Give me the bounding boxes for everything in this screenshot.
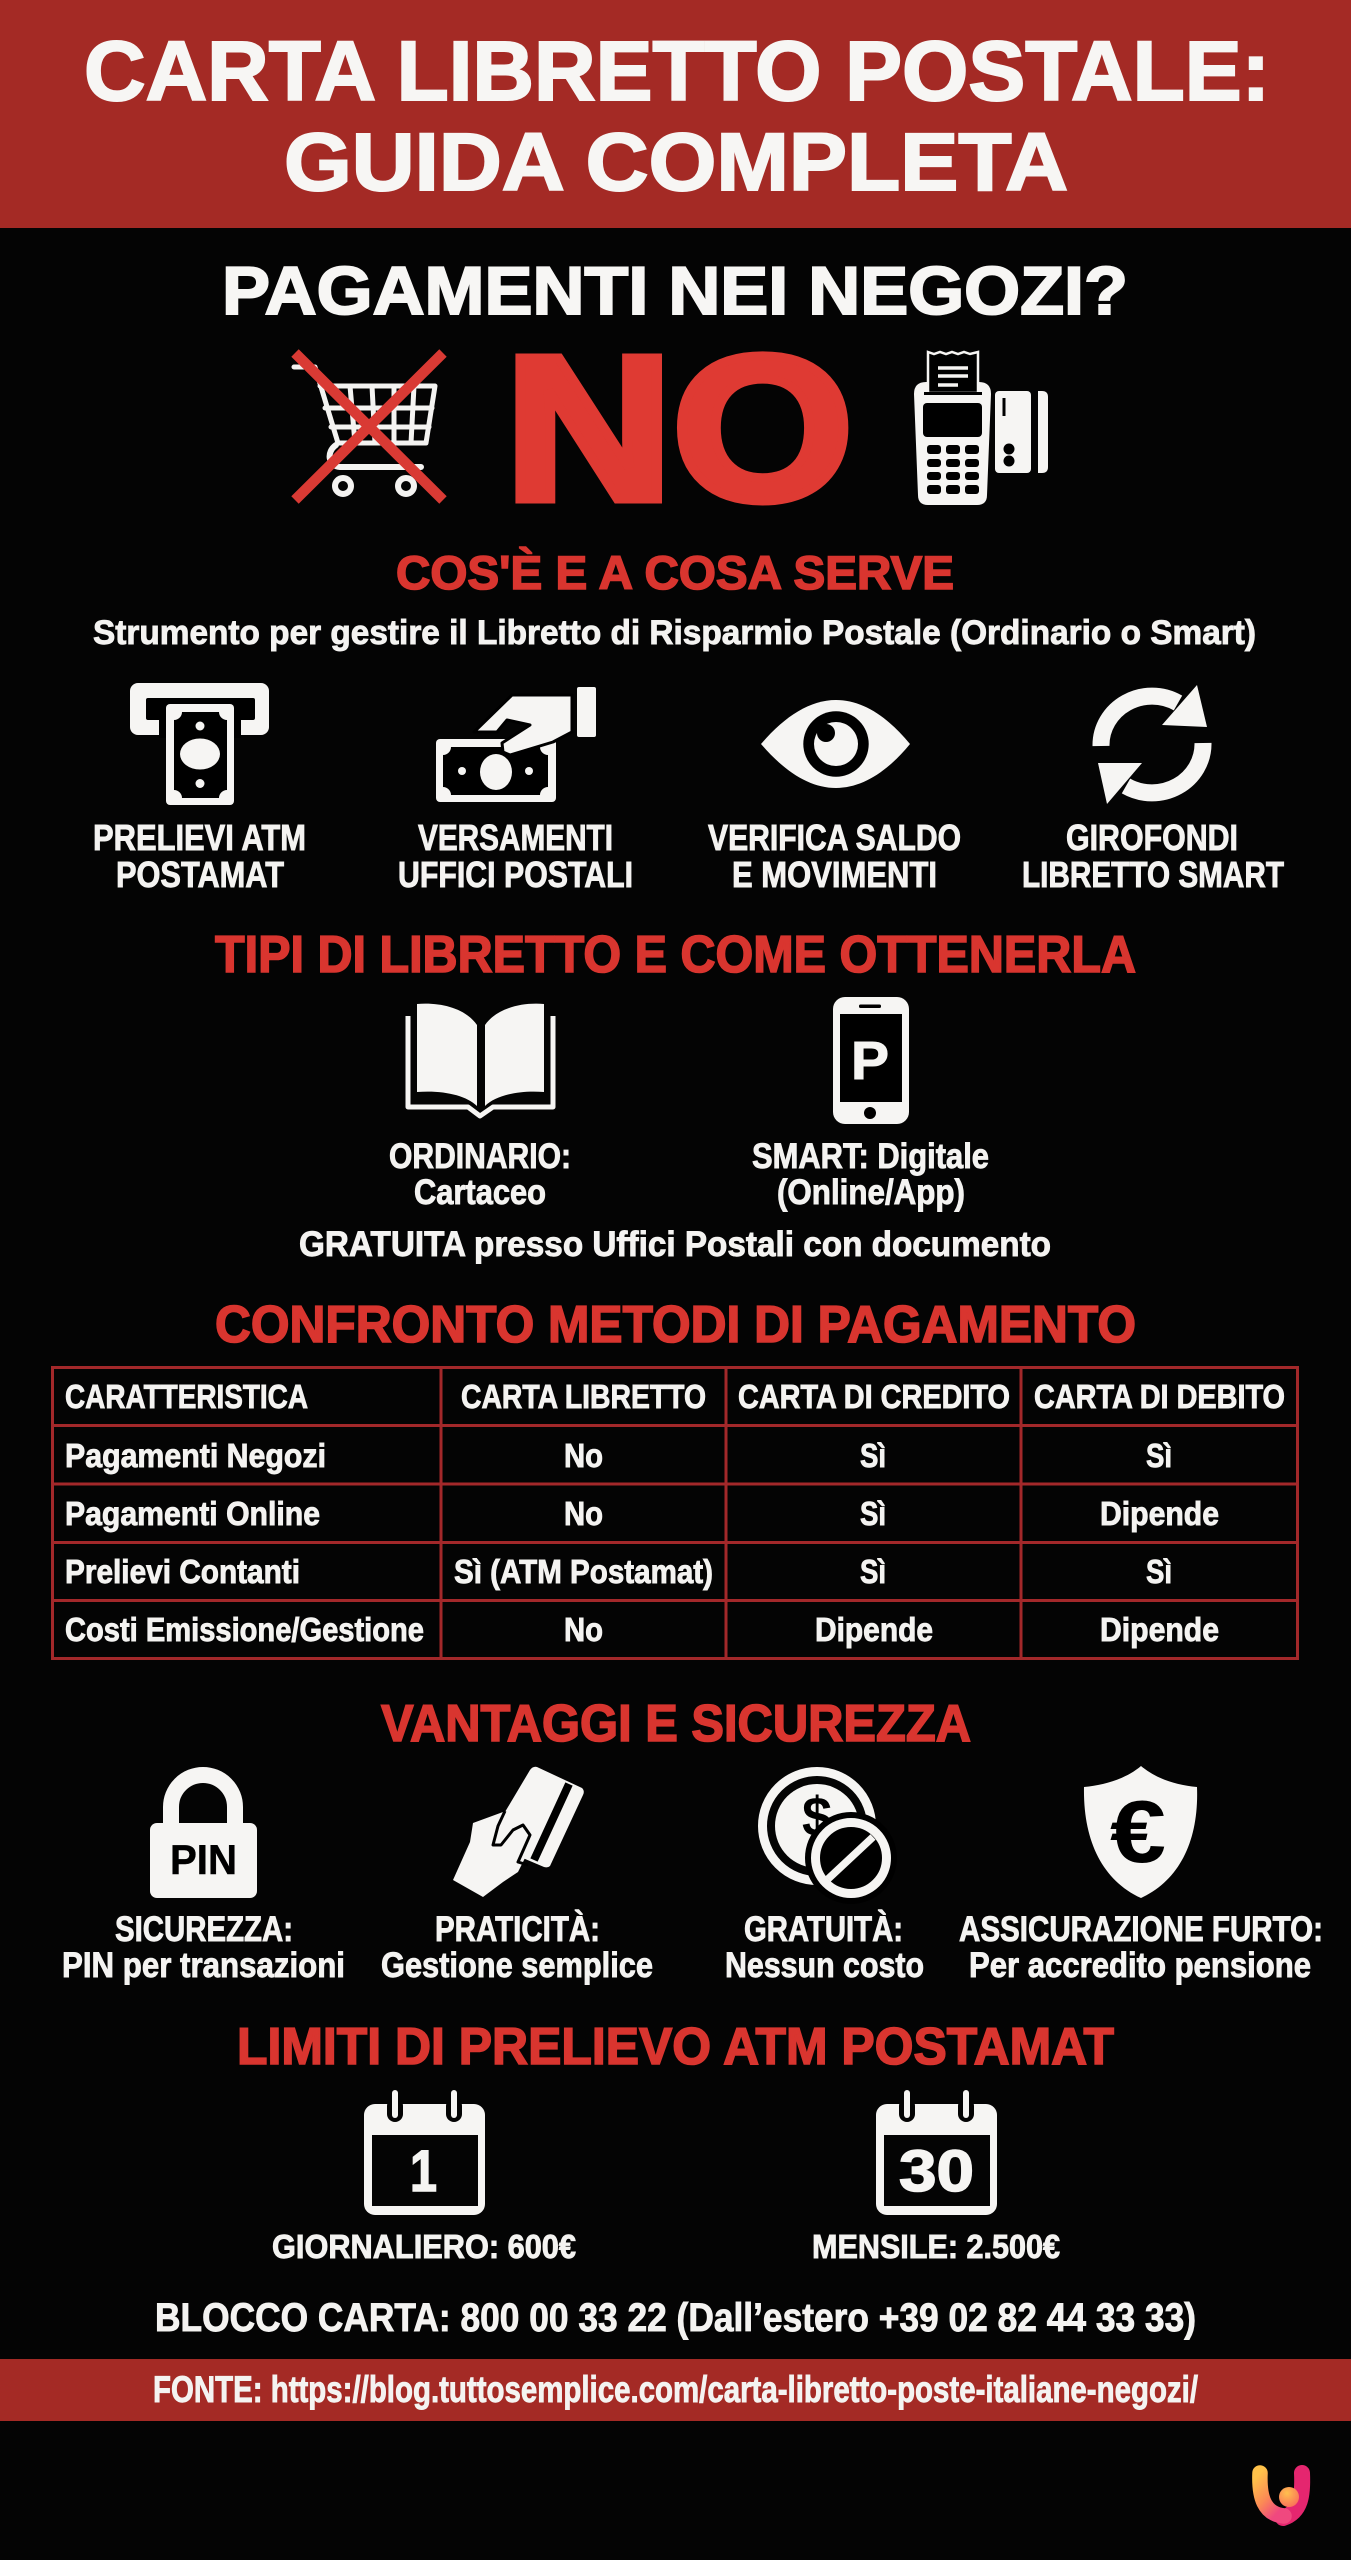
feature: verifica saldo: E MOVIMENTI <box>732 854 937 895</box>
icon: open book <box>408 1004 553 1116</box>
table header row: CARATTERISTICA <box>65 1378 308 1415</box>
feature: girofondi: GIROFONDI <box>1066 817 1238 858</box>
description: Strumento per gestire il Libretto di Risparmio Postale (Ordinario o Smart) <box>93 614 1256 652</box>
type: ordinario: Cartaceo <box>414 1173 546 1212</box>
title <box>84 24 1270 208</box>
row: costi: Costi Emissione/Gestione <box>65 1611 424 1648</box>
icon: euro shield <box>1084 1766 1197 1898</box>
limit: giornaliero: GIORNALIERO: 600€ <box>272 2228 576 2265</box>
row: pagamenti negozi: Pagamenti Negozi <box>65 1437 326 1474</box>
source band <box>0 2359 1351 2421</box>
question heading: PAGAMENTI NEI NEGOZI? <box>222 253 1128 329</box>
big NO: NO <box>505 314 853 543</box>
advantage: praticità: PRATICITÀ: <box>435 1909 600 1949</box>
icon: ATM cash <box>130 683 269 805</box>
row: pagamenti negozi: Sì <box>1146 1437 1172 1474</box>
icon: PIN padlock <box>150 1775 257 1898</box>
table header row: CARTA DI DEBITO <box>1034 1378 1285 1415</box>
advantage: gratuità: Nessun costo <box>725 1946 924 1985</box>
row: costi: Dipende <box>815 1611 933 1648</box>
feature: prelievi ATM: PRELIEVI ATM <box>93 817 306 858</box>
feature: versamenti <box>398 687 633 895</box>
feature: prelievi ATM <box>93 683 306 895</box>
icon: calendar 1 <box>364 2090 485 2215</box>
row: prelievi contanti: Sì <box>1146 1553 1172 1590</box>
icon: calendar 1: 1 <box>410 2139 437 2204</box>
advantage: praticità: Gestione semplice <box>381 1946 653 1985</box>
icon: euro shield: € <box>1110 1782 1166 1881</box>
section heading: vantaggi: VANTAGGI E SICUREZZA <box>381 1695 971 1753</box>
icon: calendar 30: 30 <box>899 2139 974 2204</box>
icon: hand depositing money <box>436 687 596 802</box>
advantage: assicurazione: Per accredito pensione <box>969 1946 1311 1985</box>
limit: giornaliero <box>272 2090 576 2265</box>
row: prelievi contanti <box>65 1553 1172 1590</box>
row: pagamenti online: Pagamenti Online <box>65 1495 320 1532</box>
row: pagamenti online: No <box>564 1495 603 1532</box>
panel: pagamenti nei negozi <box>222 253 1128 543</box>
feature: prelievi ATM: POSTAMAT <box>116 854 284 895</box>
feature: verifica saldo: VERIFICA SALDO <box>708 817 961 858</box>
type: ordinario <box>389 1004 571 1212</box>
limit: mensile <box>812 2090 1060 2265</box>
row: costi: Dipende <box>1100 1611 1219 1648</box>
feature: verifica saldo <box>708 700 961 895</box>
note: how to obtain: GRATUITA presso Uffici Postali con documento <box>299 1225 1051 1264</box>
title: CARTA LIBRETTO POSTALE: <box>84 24 1270 118</box>
advantage: assicurazione <box>959 1766 1323 1985</box>
icon: PIN padlock: PIN <box>170 1836 237 1883</box>
row: pagamenti online: Dipende <box>1100 1495 1219 1532</box>
row: pagamenti online <box>65 1495 1219 1532</box>
icon: calendar 30 <box>876 2090 997 2215</box>
feature: girofondi <box>1022 685 1284 895</box>
icon: POS terminal and card <box>914 352 1048 505</box>
row: prelievi contanti: Sì (ATM Postamat) <box>454 1553 713 1590</box>
advantage: gratuità: GRATUITÀ: <box>744 1909 903 1949</box>
table header row <box>65 1378 1285 1415</box>
comparison table <box>52 1367 1298 1659</box>
row: prelievi contanti: Prelievi Contanti <box>65 1553 300 1590</box>
feature: versamenti: VERSAMENTI <box>418 817 613 858</box>
advantage: praticità <box>381 1767 653 1985</box>
title: GUIDA COMPLETA <box>284 117 1068 208</box>
feature: versamenti: UFFICI POSTALI <box>398 854 633 895</box>
feature: girofondi: LIBRETTO SMART <box>1022 854 1284 895</box>
row: pagamenti negozi: No <box>564 1437 603 1474</box>
row: prelievi contanti: Sì <box>860 1553 886 1590</box>
icon: sync arrows <box>1098 685 1207 804</box>
table header row: CARTA LIBRETTO <box>461 1378 706 1415</box>
section heading: cos'è: COS'È E A COSA SERVE <box>396 546 954 599</box>
row: costi: No <box>564 1611 603 1648</box>
card block phone number: BLOCCO CARTA: 800 00 33 22 (Dall’estero +39 02 82 44 33 33) <box>155 2296 1196 2340</box>
section heading: limiti: LIMITI DI PRELIEVO ATM POSTAMAT <box>237 2018 1114 2076</box>
icon: crossed-out shopping cart <box>294 353 443 500</box>
logo <box>1260 2473 1302 2518</box>
section heading: confronto: CONFRONTO METODI DI PAGAMENTO <box>215 1296 1136 1354</box>
type: ordinario: ORDINARIO: <box>389 1137 571 1176</box>
icon: coin with prohibition sign: $ <box>802 1785 832 1848</box>
advantage: gratuità <box>725 1772 924 1985</box>
row: pagamenti negozi: Sì <box>860 1437 886 1474</box>
table header row: CARTA DI CREDITO <box>738 1378 1010 1415</box>
advantage: sicurezza <box>62 1775 345 1985</box>
icon: smartphone: P <box>851 1031 889 1091</box>
section heading: tipi di libretto: TIPI DI LIBRETTO E COME OTTENERLA <box>215 926 1136 984</box>
row: pagamenti negozi <box>65 1437 1172 1474</box>
icon: eye <box>761 700 910 788</box>
row: costi <box>65 1611 1219 1648</box>
limit: mensile: MENSILE: 2.500€ <box>812 2228 1060 2265</box>
icon: smartphone <box>833 997 909 1124</box>
icon: coin with prohibition sign <box>762 1772 897 1904</box>
type: smart <box>752 997 989 1212</box>
advantage: sicurezza: SICUREZZA: <box>115 1910 293 1949</box>
advantage: sicurezza: PIN per transazioni <box>62 1946 345 1985</box>
row: pagamenti online: Sì <box>860 1495 886 1532</box>
header banner <box>0 0 1351 228</box>
icon: hand holding card <box>453 1767 584 1897</box>
type: smart: SMART: Digitale <box>752 1137 989 1176</box>
type: smart: (Online/App) <box>777 1173 965 1212</box>
